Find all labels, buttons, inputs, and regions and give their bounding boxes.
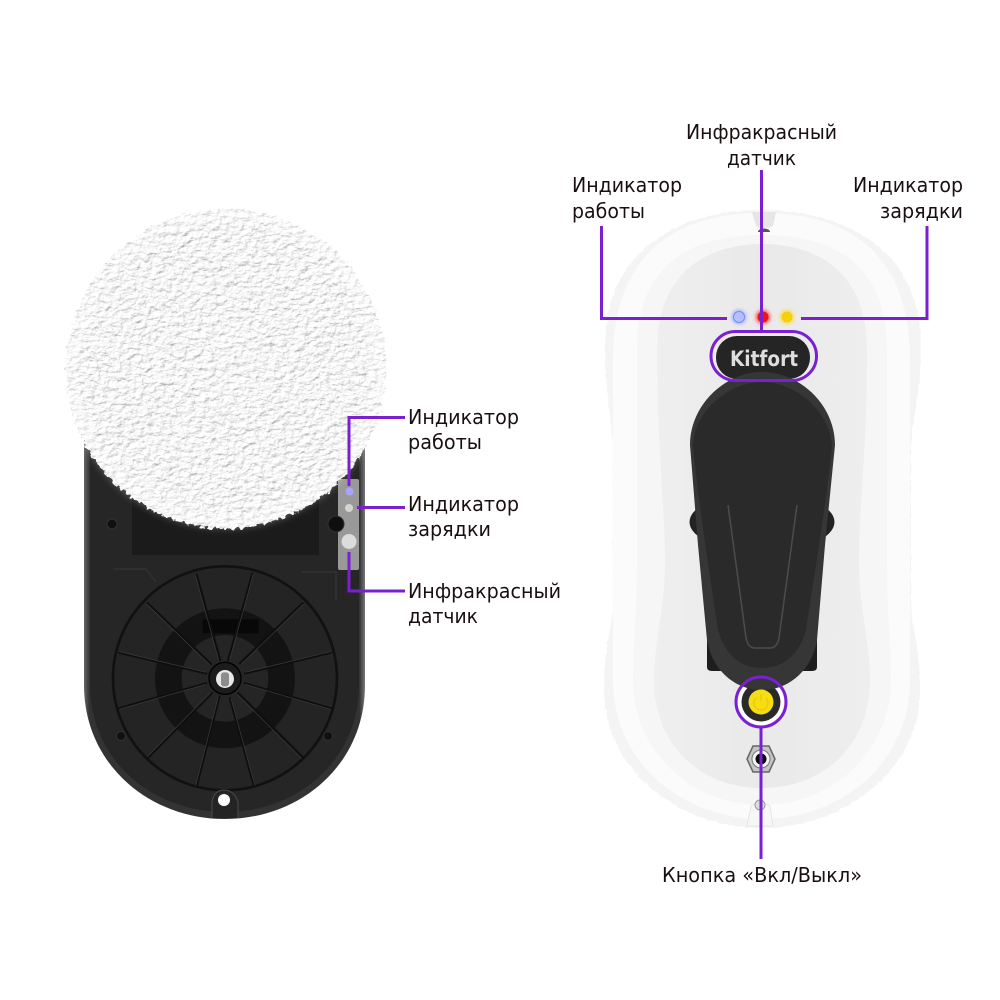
top notch: [752, 212, 776, 232]
highlight: logo: [711, 332, 816, 380]
device: front view: [604, 210, 921, 828]
power button: [738, 679, 784, 725]
label: front work indicator: работы: [572, 199, 645, 223]
logo badge: Kitfort: [730, 347, 798, 371]
callout lines: [349, 170, 927, 859]
label: front work indicator: [572, 173, 682, 223]
bottom mount hole: [212, 790, 238, 818]
bottom notch: [747, 800, 773, 826]
label: back infrared sensor: Инфракрасный: [408, 579, 561, 603]
microfibre pad: [66, 208, 386, 528]
leader: front infrared sensor: [760, 170, 763, 330]
logo badge: [716, 336, 810, 379]
label: back charging indicator: [408, 492, 519, 541]
handle base: [707, 640, 817, 671]
label: back charging indicator: Индикатор: [408, 492, 519, 516]
fan hub: [209, 662, 241, 694]
power button cap: [748, 690, 774, 714]
back housing: [84, 440, 365, 819]
inner housing panel: [90, 440, 359, 812]
label: front infrared sensor: Инфракрасный: [686, 120, 837, 144]
leader: back work indicator: [349, 418, 405, 486]
corner screws: [107, 519, 332, 740]
label: back charging indicator: зарядки: [408, 517, 491, 541]
leader: front work indicator: [602, 226, 727, 318]
label: front charging indicator: Индикатор: [853, 173, 963, 197]
label: front charging indicator: [853, 173, 963, 223]
label: front work indicator: Индикатор: [572, 173, 682, 197]
label: back work indicator: [408, 405, 519, 454]
label: back work indicator: работы: [408, 430, 482, 454]
outer body: [613, 213, 910, 819]
handle side lobes: [690, 492, 834, 552]
device: back view: [66, 208, 386, 819]
fan wheel: [113, 566, 337, 790]
highlight: power button: [736, 677, 786, 727]
leader: back infrared sensor: [349, 552, 405, 591]
sensor strip: [328, 479, 359, 570]
label: front infrared sensor: датчик: [727, 146, 796, 170]
label: power button: Кнопка «Вкл/Выкл»: [662, 863, 862, 887]
handle: [690, 372, 835, 690]
charging jack: [747, 746, 775, 772]
leader: front charging indicator: [801, 226, 927, 318]
middle body ring: [633, 235, 891, 805]
label: front charging indicator: зарядки: [880, 199, 963, 223]
label: back work indicator: Индикатор: [408, 405, 519, 429]
inner plate: [654, 244, 870, 788]
label: back infrared sensor: [408, 579, 561, 628]
status lights: [732, 310, 794, 324]
label: back infrared sensor: датчик: [408, 604, 478, 628]
leader: power button: [760, 727, 762, 859]
cleaning pads: [604, 210, 921, 828]
leader: back charging indicator: [357, 506, 405, 509]
label: front infrared sensor: [686, 120, 837, 170]
